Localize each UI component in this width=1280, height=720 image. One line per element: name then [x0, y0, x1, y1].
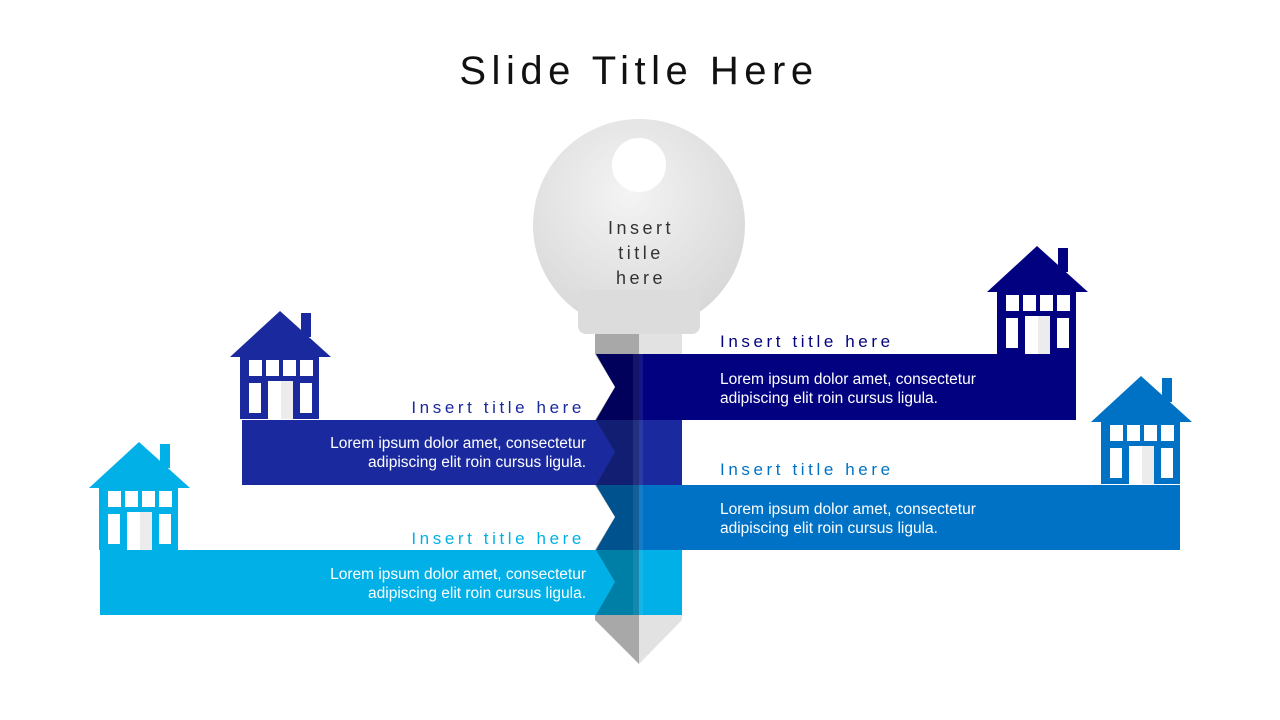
band 2: Insert title here	[411, 398, 585, 417]
band 1: adipiscing elit roin cursus ligula.	[720, 390, 938, 407]
key shaft	[595, 334, 682, 664]
key head	[533, 119, 745, 334]
title: Slide Title Here	[459, 49, 819, 93]
band 2	[230, 311, 682, 485]
band 1: Lorem ipsum dolor amet, consectetur	[720, 371, 976, 388]
band 3: Insert title here	[720, 460, 894, 479]
band 2: adipiscing elit roin cursus ligula.	[368, 454, 586, 471]
band 4: adipiscing elit roin cursus ligula.	[368, 585, 586, 602]
band 3: Lorem ipsum dolor amet, consectetur	[720, 501, 976, 518]
house 1	[987, 246, 1088, 354]
band 3: adipiscing elit roin cursus ligula.	[720, 520, 938, 537]
shaft overlay	[595, 354, 643, 615]
key	[533, 119, 745, 664]
house 2	[230, 311, 331, 419]
band 4: Lorem ipsum dolor amet, consectetur	[330, 566, 586, 583]
band 3	[596, 376, 1192, 550]
key label: title	[618, 243, 664, 263]
band 2: Lorem ipsum dolor amet, consectetur	[330, 435, 586, 452]
band 4	[89, 442, 682, 615]
house 3	[1091, 376, 1192, 484]
band 1: Insert title here	[720, 332, 894, 351]
key label: here	[616, 268, 666, 288]
band 4: Insert title here	[411, 529, 585, 548]
band 1	[596, 246, 1088, 420]
key label: Insert	[608, 218, 674, 238]
house 4	[89, 442, 190, 550]
